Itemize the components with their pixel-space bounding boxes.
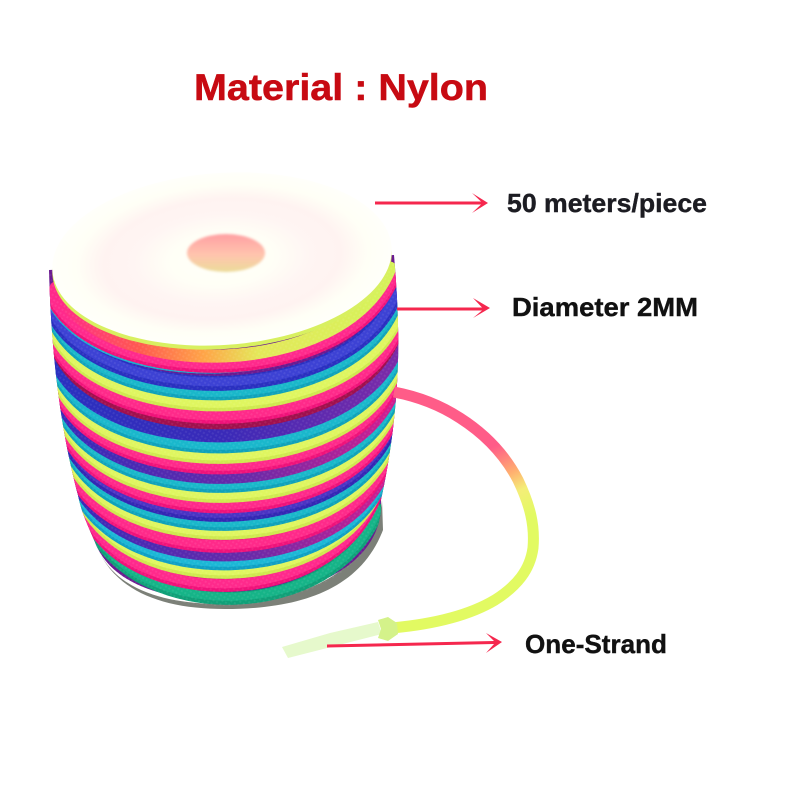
title: Material : Nylon — [194, 67, 488, 108]
label: 50 meters/piece: 50 meters/piece — [507, 188, 707, 218]
cord braid texture — [40, 260, 405, 615]
arrow: diameter — [397, 298, 490, 318]
bottom flange shadow — [97, 500, 383, 609]
loose cord end — [282, 392, 533, 658]
frayed tip — [282, 622, 382, 658]
label: diameter: Diameter 2MM — [512, 292, 698, 322]
arrow: 50 meters/piece — [375, 193, 488, 213]
disc rim — [46, 165, 398, 361]
disc top — [46, 161, 398, 357]
knot — [378, 617, 398, 641]
coil underlay — [49, 255, 398, 600]
spool hole — [187, 234, 265, 272]
label: one-strand: One-Strand — [525, 629, 667, 659]
spool of rainbow cord — [40, 161, 405, 615]
wound cords — [50, 268, 398, 598]
free strand — [392, 392, 533, 628]
arrow: one-strand — [327, 633, 502, 653]
